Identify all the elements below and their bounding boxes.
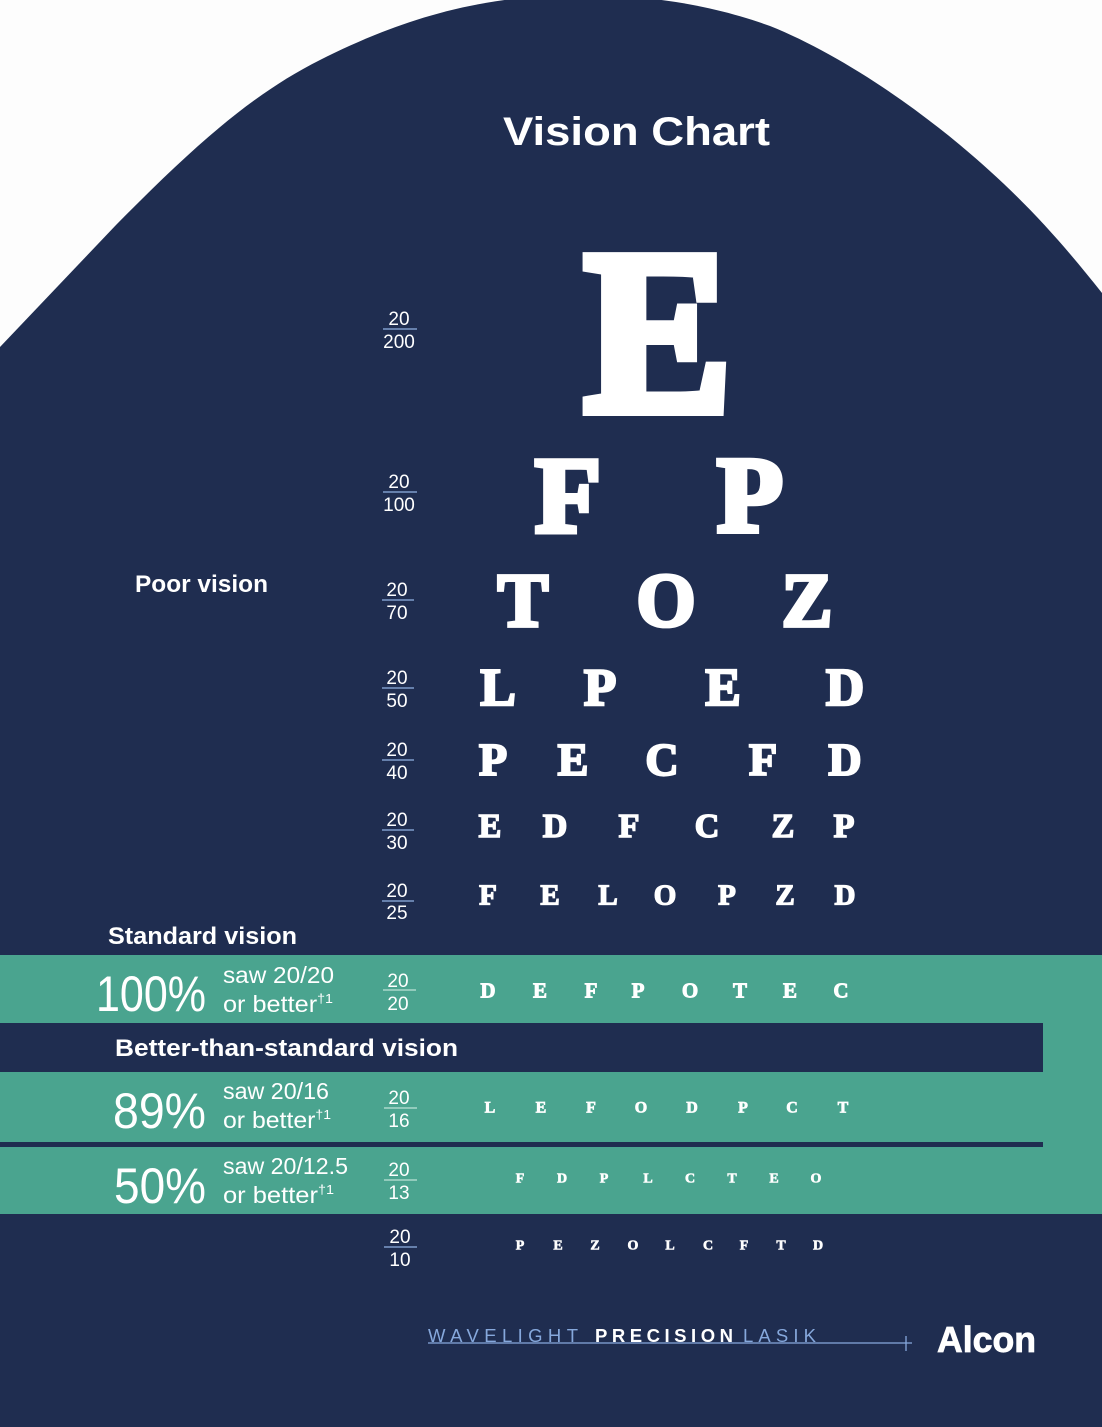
fraction 20/200: 200 <box>383 332 415 353</box>
stat: 100 percent: †1 <box>317 991 333 1006</box>
row 20/30: F <box>619 808 639 845</box>
row 20/16: T <box>838 1100 849 1117</box>
row 20/40: D <box>828 734 862 785</box>
fraction 20/10: 10 <box>389 1250 411 1271</box>
fraction 20/40: 20 <box>386 740 408 761</box>
stat: 100 percent: or better <box>223 991 309 1017</box>
row 20/70: Z <box>782 559 832 643</box>
row 20/13: O <box>811 1172 822 1187</box>
row 20/25: F <box>479 879 497 911</box>
row 20/100 <box>535 436 783 556</box>
row 20/40 <box>479 734 862 785</box>
row 20/25: D <box>835 879 855 911</box>
stat: 89 percent <box>113 1078 331 1139</box>
row 20/40: C <box>645 734 679 785</box>
row 20/25: E <box>540 879 560 911</box>
fraction 20/20: 20 <box>387 971 409 992</box>
fraction 20/20 <box>383 971 416 1015</box>
row 20/100: P <box>717 436 783 556</box>
stat: 89 percent: †1 <box>315 1107 331 1122</box>
row 20/20: O <box>682 979 698 1003</box>
row 20/70 <box>498 559 832 643</box>
row 20/16: F <box>586 1100 596 1117</box>
row 20/50 <box>480 659 864 717</box>
fraction 20/10 <box>384 1227 417 1271</box>
row 20/16 <box>485 1100 849 1117</box>
fraction 20/20: 20 <box>387 994 409 1015</box>
label: better-than-standard vision: Better-than-standard vision <box>115 1035 458 1062</box>
row 20/25: O <box>654 879 676 911</box>
row 20/16: L <box>485 1100 495 1117</box>
brand: WaveLight Precision LASIK lockup: PRECISION <box>595 1325 733 1346</box>
row 20/30: E <box>479 808 501 845</box>
row 20/10: L <box>665 1239 675 1254</box>
row 20/16: D <box>686 1100 698 1117</box>
row 20/40: F <box>749 734 777 785</box>
fraction 20/16: 20 <box>388 1088 410 1109</box>
label: standard vision: Standard vision <box>108 923 297 950</box>
fraction 20/50: 50 <box>386 691 408 712</box>
row 20/13: T <box>727 1172 737 1187</box>
fraction 20/30: 30 <box>386 833 408 854</box>
row 20/100: F <box>535 436 601 556</box>
row 20/25 <box>479 879 855 911</box>
row 20/10: O <box>628 1239 639 1254</box>
fraction 20/100: 20 <box>388 472 410 493</box>
logo: Alcon: Alcon <box>937 1319 1036 1360</box>
fraction 20/50: 20 <box>386 668 408 689</box>
fraction 20/200 <box>383 309 417 353</box>
title: Vision Chart <box>503 110 770 154</box>
row 20/13: D <box>557 1172 567 1187</box>
row 20/16: E <box>536 1100 546 1117</box>
acuity fractions column <box>382 309 417 1271</box>
row 20/10: D <box>813 1239 823 1254</box>
fraction 20/100 <box>383 472 417 516</box>
green highlight bands <box>0 955 1102 1214</box>
row 20/30: Z <box>772 808 794 845</box>
fraction 20/30 <box>382 810 414 854</box>
row 20/25: P <box>718 879 736 911</box>
row 20/50: D <box>826 659 864 717</box>
row 20/13: L <box>643 1172 653 1187</box>
row 20/40: E <box>558 734 588 785</box>
row 20/50: L <box>480 659 516 717</box>
eye chart letters <box>479 204 864 1254</box>
row 20/30 <box>479 808 854 845</box>
row 20/50: P <box>584 659 616 717</box>
stat: 50 percent: saw 20/12.5 <box>223 1153 348 1179</box>
row 20/10: T <box>776 1239 786 1254</box>
stat: 50 percent: 50% <box>114 1158 206 1214</box>
brand: WaveLight Precision LASIK lockup: WAVELIGHT <box>428 1325 578 1346</box>
row 20/30: D <box>543 808 567 845</box>
row 20/20: P <box>632 979 645 1003</box>
row 20/20: E <box>783 979 797 1003</box>
row 20/10: F <box>740 1239 748 1254</box>
row 20/13: C <box>685 1172 695 1187</box>
fraction 20/30: 20 <box>386 810 408 831</box>
fraction 20/16 <box>384 1088 417 1132</box>
row 20/20: F <box>585 979 597 1003</box>
fraction 20/25 <box>382 881 414 924</box>
row 20/30: P <box>834 808 854 845</box>
fraction 20/10: 20 <box>389 1227 411 1248</box>
fraction 20/25: 25 <box>386 903 408 924</box>
row 20/10: P <box>516 1239 525 1254</box>
stat: 100 percent: saw 20/20 <box>223 962 334 988</box>
row 20/40: P <box>479 734 507 785</box>
fraction 20/70: 20 <box>386 580 408 601</box>
fraction 20/13: 20 <box>388 1160 410 1181</box>
row 20/13: F <box>516 1172 524 1187</box>
brand: WaveLight Precision LASIK lockup: LASIK <box>743 1325 817 1346</box>
fraction 20/100: 100 <box>383 495 415 516</box>
stat: 89 percent: 89% <box>113 1083 206 1139</box>
row 20/25: Z <box>775 879 795 911</box>
stat: 50 percent <box>114 1153 348 1214</box>
fraction 20/70: 70 <box>386 603 408 624</box>
stat: 50 percent: or better <box>223 1182 309 1208</box>
row 20/20: C <box>833 979 849 1003</box>
row 20/50: E <box>705 659 741 717</box>
row 20/13 <box>516 1172 822 1187</box>
row 20/70: T <box>498 559 548 643</box>
fraction 20/13: 13 <box>388 1183 410 1204</box>
label: poor vision: Poor vision <box>135 571 268 598</box>
row 20/13: E <box>769 1172 779 1187</box>
fraction 20/50 <box>382 668 414 712</box>
row 20/20: D <box>480 979 496 1003</box>
row 20/10: Z <box>590 1239 600 1254</box>
fraction 20/25: 20 <box>386 881 408 902</box>
stat: 89 percent: or better <box>223 1107 309 1133</box>
fraction 20/40 <box>382 740 414 784</box>
row 20/20: E <box>533 979 547 1003</box>
row 20/20 <box>480 979 849 1003</box>
row 20/20: T <box>733 979 747 1003</box>
row 20/10: C <box>703 1239 713 1254</box>
row 20/30: C <box>695 808 719 845</box>
fraction 20/70 <box>382 580 414 624</box>
brand: WaveLight Precision LASIK lockup <box>428 1325 912 1351</box>
fraction 20/40: 40 <box>386 763 408 784</box>
row 20/10: E <box>553 1239 563 1254</box>
row 20/10 <box>516 1239 823 1254</box>
fraction 20/200: 20 <box>388 309 410 330</box>
stat: 50 percent: †1 <box>318 1182 334 1197</box>
stat: 100 percent: 100% <box>96 966 206 1022</box>
fraction 20/16: 16 <box>388 1111 410 1132</box>
row 20/16: O <box>635 1100 647 1117</box>
row 20/70: O <box>636 559 696 643</box>
stat: 89 percent: saw 20/16 <box>223 1078 329 1104</box>
row 20/16: C <box>786 1100 798 1117</box>
row 20/13: P <box>600 1172 609 1187</box>
fraction 20/13 <box>384 1160 417 1204</box>
row 20/16: P <box>738 1100 748 1117</box>
stat: 100 percent <box>96 962 334 1022</box>
row 20/200: E <box>584 204 732 461</box>
row 20/25: L <box>598 879 618 911</box>
